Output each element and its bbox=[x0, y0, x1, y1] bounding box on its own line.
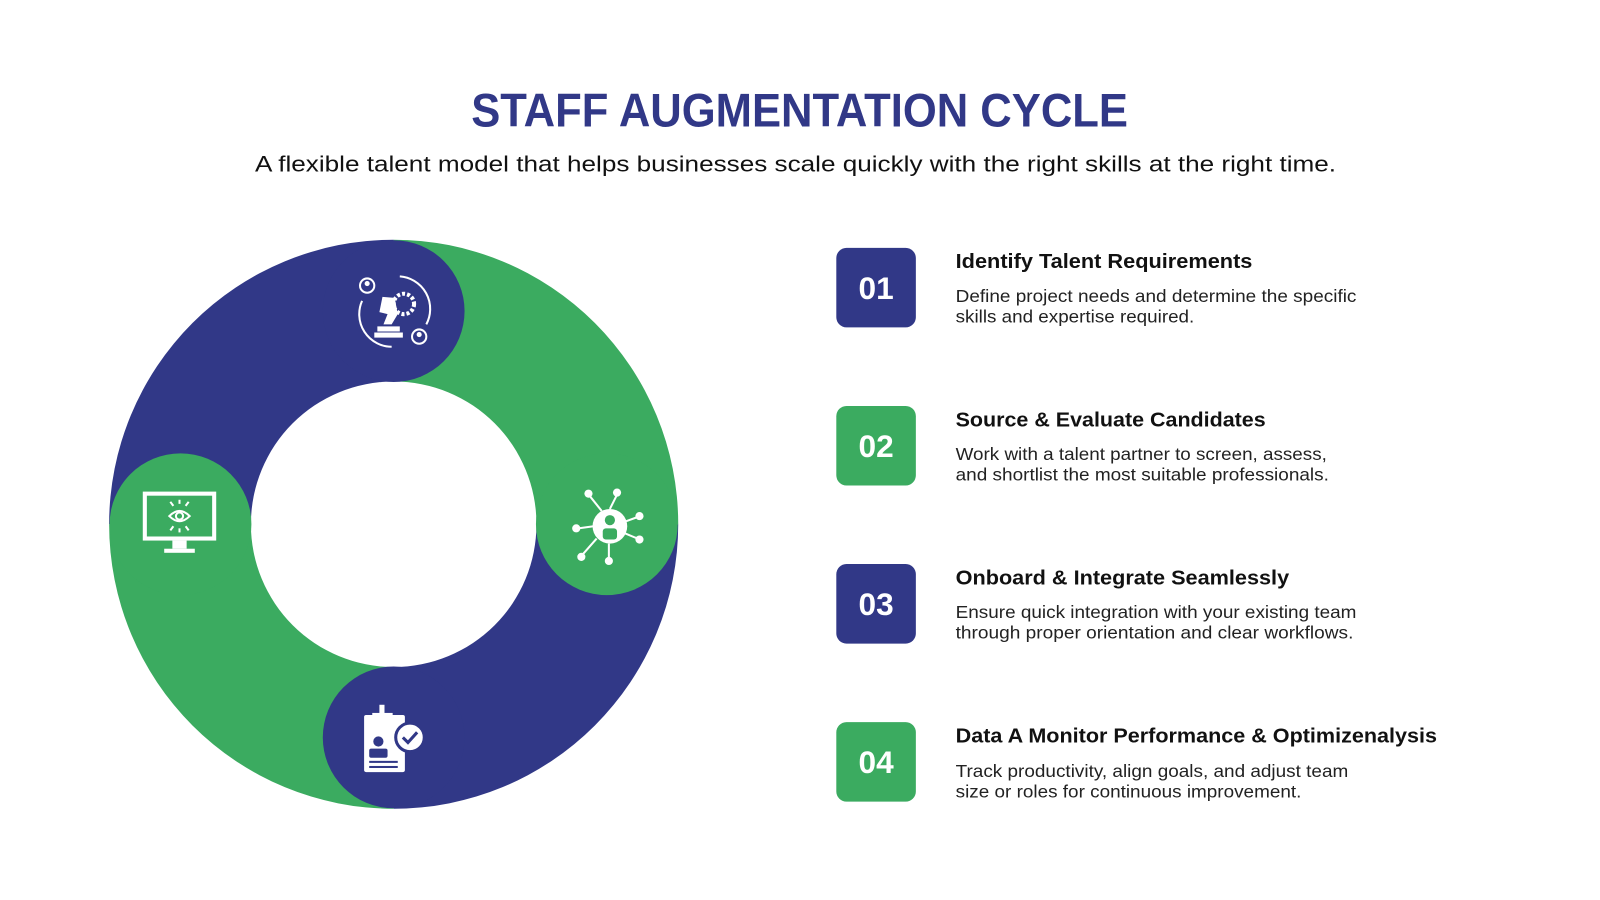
badge 03: 03 bbox=[858, 586, 894, 622]
cycle ring diagram bbox=[109, 240, 678, 809]
description 02: Work with a talent partner to screen, assess, bbox=[956, 444, 1327, 464]
cap: right green bbox=[536, 453, 678, 595]
heading 04: Data A Monitor Performance & Optimizenalysis bbox=[956, 726, 1437, 748]
step 01 bbox=[836, 248, 1357, 327]
description 02: and shortlist the most suitable professionals. bbox=[956, 464, 1329, 484]
step 04 bbox=[836, 722, 1437, 802]
badge 02: 02 bbox=[858, 428, 894, 464]
badge 01: 01 bbox=[858, 270, 894, 306]
description 03: through proper orientation and clear workflows. bbox=[956, 622, 1353, 642]
icon: network person bbox=[572, 489, 644, 565]
step 03 bbox=[836, 564, 1356, 644]
cap: top blue bbox=[323, 240, 465, 382]
subtitle: A flexible talent model that helps businesses scale quickly with the right skills at the right time. bbox=[255, 151, 1336, 176]
description 03: Ensure quick integration with your existing team bbox=[956, 602, 1356, 622]
description 04: Track productivity, align goals, and adjust team bbox=[956, 761, 1348, 781]
heading 03: Onboard & Integrate Seamlessly bbox=[956, 567, 1290, 589]
icon: monitor with eye bbox=[145, 494, 214, 553]
cap: left green bbox=[110, 453, 251, 595]
badge 04 bbox=[836, 722, 916, 802]
title: STAFF AUGMENTATION CYCLE bbox=[471, 84, 1128, 136]
segment: bottom-right blue bbox=[394, 524, 678, 809]
description 01: Define project needs and determine the specific bbox=[956, 286, 1357, 306]
description 04: size or roles for continuous improvement. bbox=[956, 782, 1301, 802]
badge 02 bbox=[836, 406, 916, 485]
step 02 bbox=[836, 406, 1329, 485]
badge 03 bbox=[836, 564, 916, 644]
icon: strategy chess knight with gear and people bbox=[359, 276, 430, 347]
segment: top-right green bbox=[394, 240, 678, 524]
badge 04: 04 bbox=[858, 744, 894, 780]
cap: bottom blue bbox=[323, 667, 465, 808]
segment: top-left blue bbox=[109, 240, 394, 524]
badge 01 bbox=[836, 248, 916, 327]
description 01: skills and expertise required. bbox=[956, 306, 1194, 326]
heading 02: Source & Evaluate Candidates bbox=[956, 409, 1266, 431]
icon: candidate profile with check bbox=[364, 705, 424, 772]
segment: bottom-left green bbox=[109, 524, 394, 809]
heading 01: Identify Talent Requirements bbox=[956, 251, 1252, 273]
